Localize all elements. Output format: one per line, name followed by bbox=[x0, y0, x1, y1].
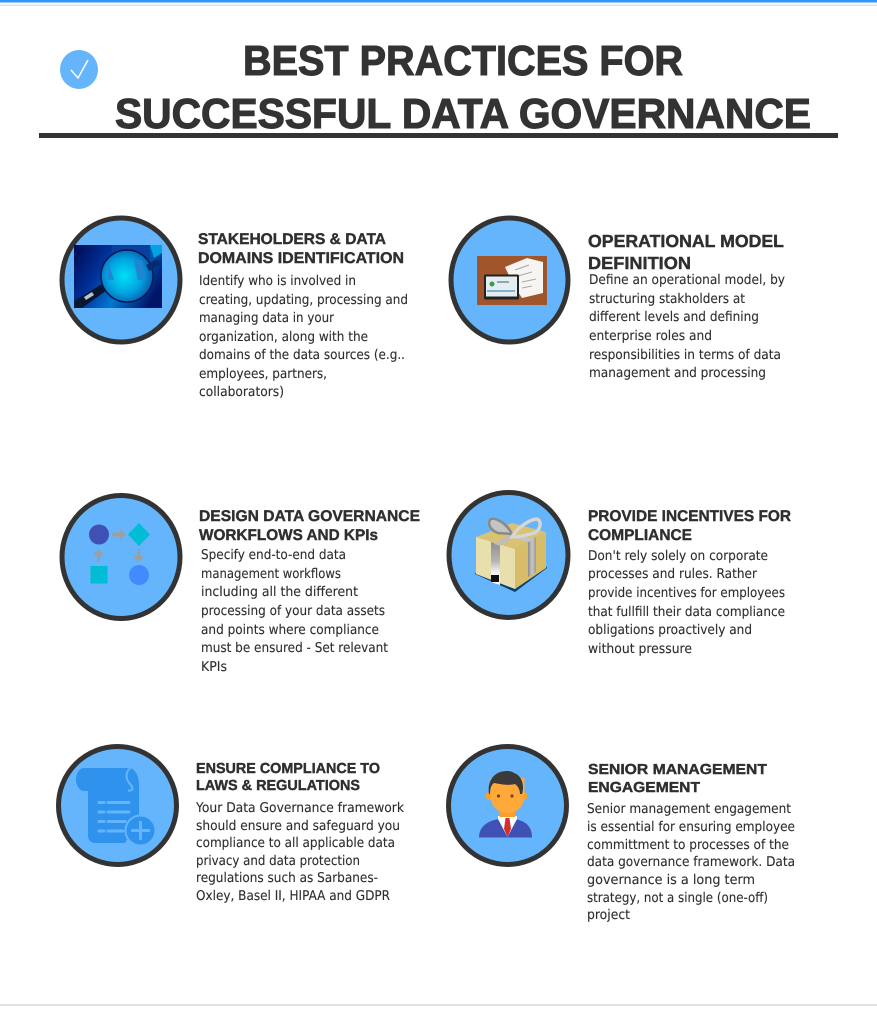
icon: tablet and documents bbox=[451, 218, 568, 342]
top border bar bbox=[0, 0, 877, 6]
text block: processing of your data assets bbox=[201, 604, 385, 619]
text block: Don't rely solely on corporate bbox=[588, 549, 768, 564]
heading bbox=[199, 508, 420, 544]
panel: workflows bbox=[62, 496, 420, 675]
text block: including all the different bbox=[201, 585, 358, 600]
heading: PROVIDE INCENTIVES FOR bbox=[588, 508, 791, 525]
text block: must be ensured - Set relevant bbox=[201, 641, 388, 656]
text block: Senior management engagement bbox=[587, 802, 791, 817]
text block: privacy and data protection bbox=[196, 854, 360, 869]
heading: DOMAINS IDENTIFICATION bbox=[198, 250, 404, 267]
icon: businessman bbox=[448, 746, 566, 864]
text block: Your Data Governance framework bbox=[195, 801, 404, 816]
title: SUCCESSFUL DATA GOVERNANCE bbox=[115, 90, 811, 137]
text block: and points where compliance bbox=[201, 623, 379, 638]
text block: obligations proactively and bbox=[588, 623, 752, 638]
text block bbox=[588, 549, 785, 657]
text block: is essential for ensuring employee bbox=[587, 820, 795, 835]
text block bbox=[199, 274, 408, 400]
title: BEST PRACTICES FOR bbox=[243, 37, 683, 84]
heading: DEFINITION bbox=[588, 253, 691, 273]
panel: operational model bbox=[451, 218, 785, 381]
heading: ENGAGEMENT bbox=[588, 780, 700, 796]
text block: strategy, not a single (one-off) bbox=[587, 891, 768, 906]
icon: scroll with plus bbox=[58, 746, 176, 864]
icon: check badge bbox=[60, 50, 98, 89]
text block: organization, along with the bbox=[199, 330, 368, 345]
text block: should ensure and safeguard you bbox=[196, 819, 400, 834]
text block: provide incentives for employees bbox=[588, 586, 785, 601]
text block: Identify who is involved in bbox=[199, 274, 356, 289]
text block: Oxley, Basel II, HIPAA and GDPR bbox=[196, 889, 390, 904]
text block bbox=[587, 802, 795, 923]
text block: governance is a long term bbox=[587, 873, 755, 888]
text block: employees, partners, bbox=[199, 367, 327, 382]
icon: magnifier on data bbox=[62, 218, 180, 342]
bottom border line bbox=[0, 1004, 877, 1006]
heading: SENIOR MANAGEMENT bbox=[588, 762, 767, 778]
heading: OPERATIONAL MODEL bbox=[588, 231, 784, 251]
text block: without pressure bbox=[588, 642, 692, 657]
text block: KPIs bbox=[201, 660, 227, 675]
text block: domains of the data sources (e.g.. bbox=[199, 348, 405, 363]
text block: regulations such as Sarbanes- bbox=[196, 871, 378, 886]
heading bbox=[588, 762, 767, 796]
text block: Define an operational model, by bbox=[589, 273, 785, 288]
panel: incentives bbox=[449, 492, 791, 657]
heading: LAWS & REGULATIONS bbox=[196, 778, 360, 794]
text block bbox=[589, 273, 785, 381]
text block: enterprise roles and bbox=[589, 329, 712, 344]
text block: creating, updating, processing and bbox=[199, 293, 408, 308]
heading: DESIGN DATA GOVERNANCE bbox=[199, 508, 420, 525]
text block: management workflows bbox=[201, 567, 341, 582]
text block: processes and rules. Rather bbox=[588, 567, 757, 582]
text block: managing data in your bbox=[199, 311, 334, 326]
heading bbox=[588, 231, 784, 273]
text block: committment to processes of the bbox=[587, 838, 789, 853]
heading: WORKFLOWS AND KPIs bbox=[199, 527, 378, 544]
title underline bbox=[39, 133, 838, 138]
panel: compliance bbox=[58, 746, 404, 904]
heading bbox=[198, 231, 404, 267]
text block: data governance framework. Data bbox=[587, 855, 795, 870]
text block: Specify end-to-end data bbox=[201, 548, 346, 563]
text block bbox=[201, 548, 388, 675]
heading: COMPLIANCE bbox=[588, 527, 692, 544]
text block: management and processing bbox=[589, 366, 766, 381]
text block: structuring stakholders at bbox=[589, 292, 745, 307]
heading: STAKEHOLDERS & DATA bbox=[198, 231, 386, 248]
heading bbox=[588, 508, 791, 544]
title bbox=[115, 37, 811, 137]
panel: stakeholders bbox=[62, 218, 408, 400]
text block bbox=[195, 801, 404, 904]
heading bbox=[196, 761, 380, 794]
heading: ENSURE COMPLIANCE TO bbox=[196, 761, 380, 777]
icon: gift box bbox=[449, 492, 568, 618]
text block: different levels and defining bbox=[589, 310, 759, 325]
text block: that fullfill their data compliance bbox=[588, 605, 785, 620]
text block: project bbox=[587, 908, 630, 923]
text block: compliance to all applicable data bbox=[196, 836, 395, 851]
panel: senior management bbox=[448, 746, 795, 923]
icon: workflow diagram bbox=[62, 496, 180, 618]
text block: collaborators) bbox=[199, 385, 284, 400]
text block: responsibilities in terms of data bbox=[589, 348, 781, 363]
